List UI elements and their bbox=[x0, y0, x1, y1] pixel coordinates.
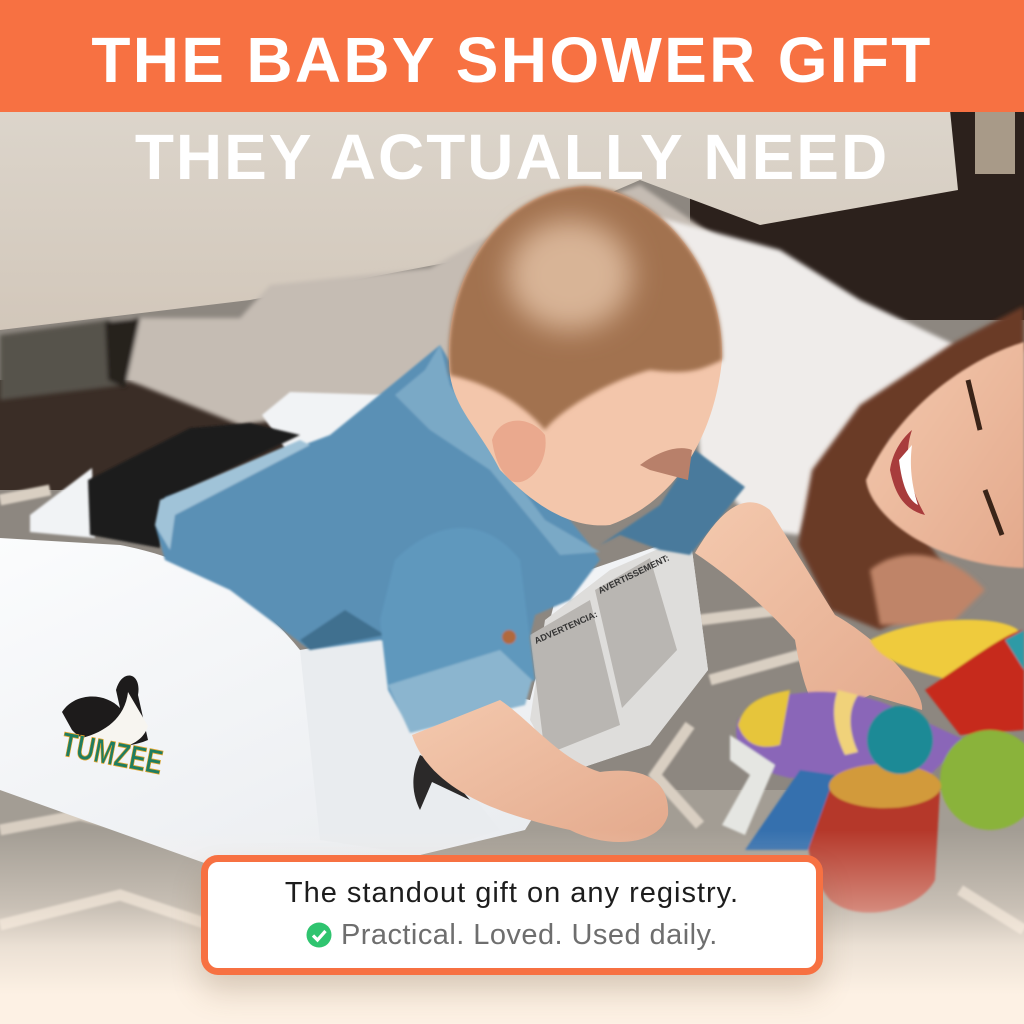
title line 2: THEY ACTUALLY NEED bbox=[135, 121, 889, 193]
title line 1: THE BABY SHOWER GIFT bbox=[91, 24, 933, 96]
girl hair bbox=[798, 306, 1024, 630]
callout line 2 bbox=[306, 919, 718, 951]
warning labels bbox=[533, 553, 671, 646]
white wedge back bbox=[30, 392, 430, 538]
baby shirt bbox=[155, 345, 745, 733]
baby arm right and hand bbox=[695, 502, 922, 720]
banner bbox=[0, 0, 1024, 112]
warning labels: ADVERTENCIA: bbox=[533, 609, 599, 646]
toys bbox=[722, 620, 1024, 913]
warning labels: AVERTISSEMENT: bbox=[596, 553, 671, 596]
girl face bbox=[866, 342, 1024, 625]
girl leg and sock bbox=[0, 185, 720, 425]
logo: Tumzee penguin bbox=[58, 675, 166, 782]
bottom fade bbox=[0, 830, 1024, 1024]
icon: green check bbox=[306, 922, 332, 948]
callout bbox=[201, 855, 823, 975]
logo: Tumzee penguin: TUMZEE bbox=[58, 726, 166, 782]
baby pants bbox=[88, 423, 300, 548]
penguin sticker on wedge bbox=[413, 755, 470, 810]
girl shirt bbox=[650, 215, 955, 535]
baby arm left and hand bbox=[412, 700, 668, 842]
white wedge front bbox=[0, 535, 708, 865]
callout tagline: Practical. Loved. Used daily. bbox=[341, 919, 718, 951]
rug pattern bbox=[0, 490, 1024, 930]
callout line 1: The standout gift on any registry. bbox=[285, 877, 739, 909]
baby head bbox=[449, 186, 722, 525]
